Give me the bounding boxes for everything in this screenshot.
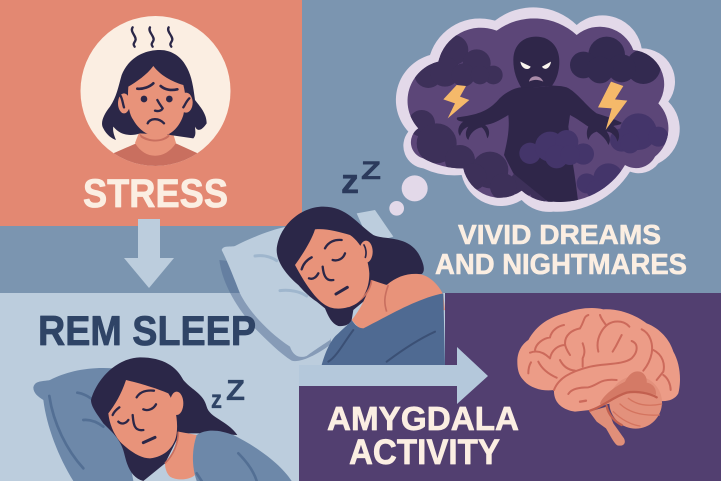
heading: amygdala activity: ACTIVITY	[349, 433, 500, 472]
heading: vivid dreams and nightmares	[435, 219, 687, 281]
storm clouds, lower	[408, 110, 549, 203]
arrow: REM sleep to amygdala	[299, 347, 488, 404]
icon: sleeping z letters, lower	[211, 375, 245, 414]
heading: amygdala activity: AMYGDALA	[327, 400, 519, 437]
icon: brain	[517, 308, 680, 446]
storm clouds, upper right	[570, 37, 661, 84]
icon: sleeping z letters, upper: Z	[361, 157, 381, 185]
heading: amygdala activity	[327, 400, 519, 472]
icon: lightning bolts	[443, 85, 469, 118]
panel: REM sleep	[0, 293, 445, 481]
heading: vivid dreams and nightmares: AND NIGHTMARES	[435, 249, 687, 281]
arrow: stress to REM sleep	[124, 219, 174, 288]
foreground cloud	[519, 130, 594, 168]
illustration: sleeping woman, upper	[219, 207, 445, 365]
icon: stressed woman portrait	[80, 16, 230, 172]
heading: vivid dreams and nightmares: VIVID DREAMS	[458, 219, 661, 250]
nightmare figure	[457, 37, 622, 203]
icon: sleeping z letters, upper: z	[341, 163, 359, 201]
panel: stress	[0, 0, 302, 226]
panel: amygdala	[299, 293, 721, 481]
heading: REM sleep: REM SLEEP	[38, 307, 256, 354]
icon: sleeping z letters, lower: z	[211, 384, 222, 414]
storm clouds, upper left	[414, 35, 503, 88]
thought cloud: nightmare	[389, 7, 683, 216]
icon: sleeping z letters, lower: Z	[226, 375, 245, 407]
illustration: sleeping woman, lower	[33, 357, 292, 481]
heading: stress: STRESS	[83, 172, 228, 216]
icon: sleeping z letters, upper	[341, 157, 381, 201]
